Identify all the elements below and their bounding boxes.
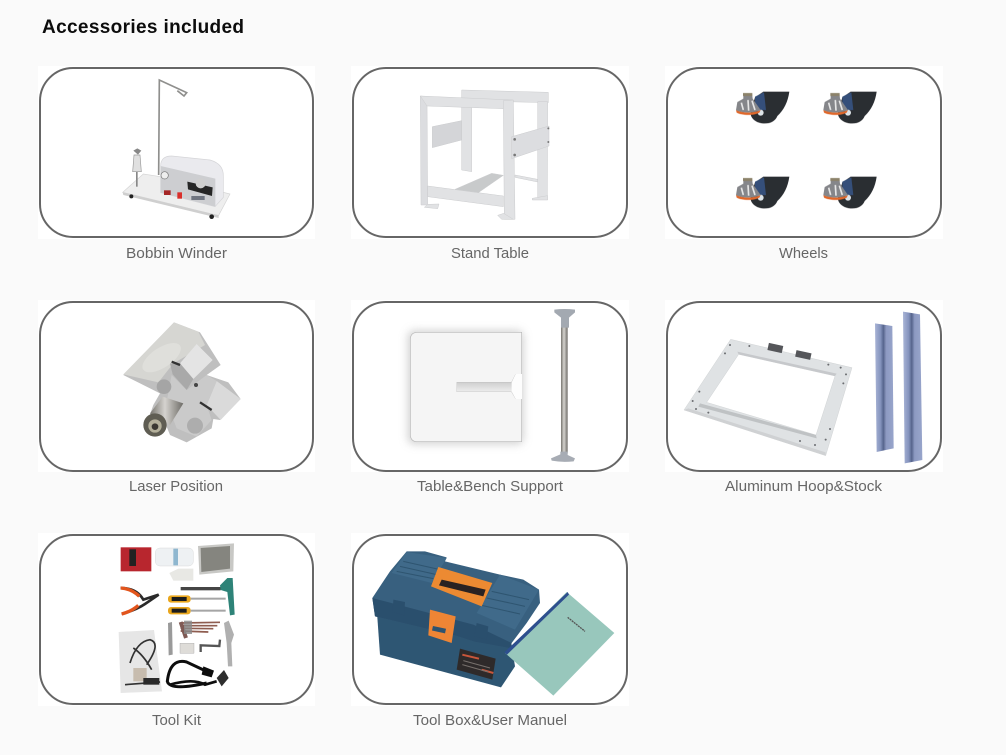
label: Bobbin Winder: Bobbin Winder bbox=[126, 245, 227, 262]
icon: wheels bbox=[736, 92, 877, 208]
icon: tool kit bbox=[119, 543, 235, 693]
panel: Aluminum Hoop&Stock bbox=[665, 300, 943, 472]
label: Table&Bench Support: Table&Bench Support bbox=[417, 478, 564, 495]
panel: Laser Position bbox=[38, 300, 315, 472]
label: Aluminum Hoop&Stock: Aluminum Hoop&Stock bbox=[725, 478, 883, 495]
icon: bobbin winder bbox=[123, 80, 230, 219]
label: Tool Box&User Manuel: Tool Box&User Manuel bbox=[413, 712, 567, 729]
icon: tool box and manual bbox=[372, 551, 614, 696]
panel: Wheels bbox=[665, 66, 943, 239]
icon: aluminum hoop and stocks bbox=[684, 312, 922, 463]
panel: Tool Kit bbox=[38, 533, 315, 706]
panel: Stand Table bbox=[351, 66, 629, 239]
label: Stand Table: Stand Table bbox=[451, 245, 529, 262]
icon: laser position module bbox=[123, 322, 241, 442]
label: Laser Position: Laser Position bbox=[129, 478, 223, 495]
panel: Bobbin Winder bbox=[38, 66, 315, 239]
title: Accessories included bbox=[42, 17, 244, 38]
icon: stand table frame bbox=[420, 90, 549, 219]
label: Tool Kit: Tool Kit bbox=[152, 712, 202, 729]
icon: table board and support pole bbox=[408, 309, 575, 462]
label: Wheels: Wheels bbox=[779, 245, 828, 262]
panel: Tool Box&User Manuel bbox=[351, 533, 629, 706]
panel: Table&Bench Support bbox=[351, 300, 629, 472]
